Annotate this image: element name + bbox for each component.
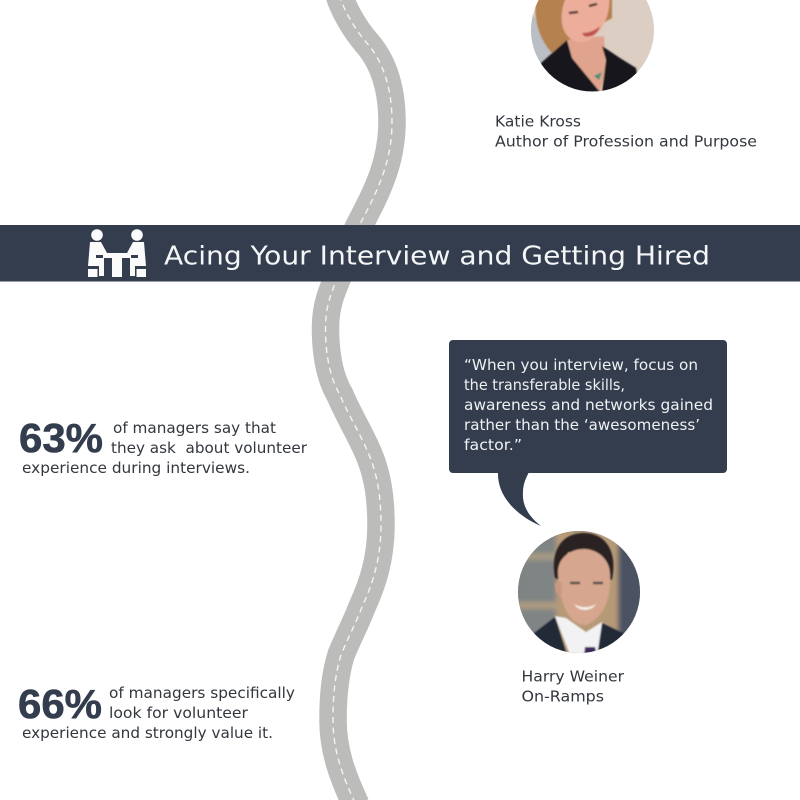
winding road bbox=[326, 0, 392, 800]
quote text: rather than the ‘awesomeness’ bbox=[464, 416, 700, 434]
stat: 66% of managers: 66% bbox=[18, 681, 102, 727]
photo: Harry Weiner bbox=[517, 530, 644, 660]
stat: 63% of managers bbox=[19, 415, 308, 477]
name: Harry Weiner: On-Ramps bbox=[522, 688, 604, 706]
photo: Katie Kross bbox=[530, 0, 655, 93]
stat: 63% of managers: experience during interviews. bbox=[22, 459, 250, 477]
name: Harry Weiner: Harry Weiner bbox=[522, 668, 625, 686]
banner heading: Acing Your Interview and Getting Hired bbox=[164, 242, 710, 272]
name: Katie Kross: Katie Kross bbox=[495, 112, 581, 130]
name: Harry Weiner bbox=[522, 668, 625, 706]
quote text: awareness and networks gained bbox=[464, 396, 713, 414]
icon: two people meeting at a table bbox=[88, 229, 146, 277]
section banner bbox=[0, 225, 800, 282]
stat: 63% of managers: they ask about volunteer bbox=[111, 439, 308, 457]
stat: 66% of managers: of managers specifically bbox=[109, 684, 295, 702]
quote speech bubble bbox=[449, 340, 727, 526]
stat: 63% of managers: of managers say that bbox=[113, 419, 276, 437]
stat: 66% of managers: look for volunteer bbox=[109, 704, 249, 722]
quote text bbox=[464, 356, 713, 454]
name: Katie Kross: Author of Profession and Purpose bbox=[495, 132, 757, 150]
quote text: the transferable skills, bbox=[464, 376, 625, 394]
stat: 66% of managers: experience and strongly value it. bbox=[22, 724, 273, 742]
quote text: “When you interview, focus on bbox=[464, 356, 698, 374]
stat: 63% of managers: 63% bbox=[19, 415, 103, 461]
quote text: factor.” bbox=[464, 436, 522, 454]
name: Katie Kross bbox=[495, 112, 757, 150]
stat: 66% of managers bbox=[18, 681, 295, 742]
